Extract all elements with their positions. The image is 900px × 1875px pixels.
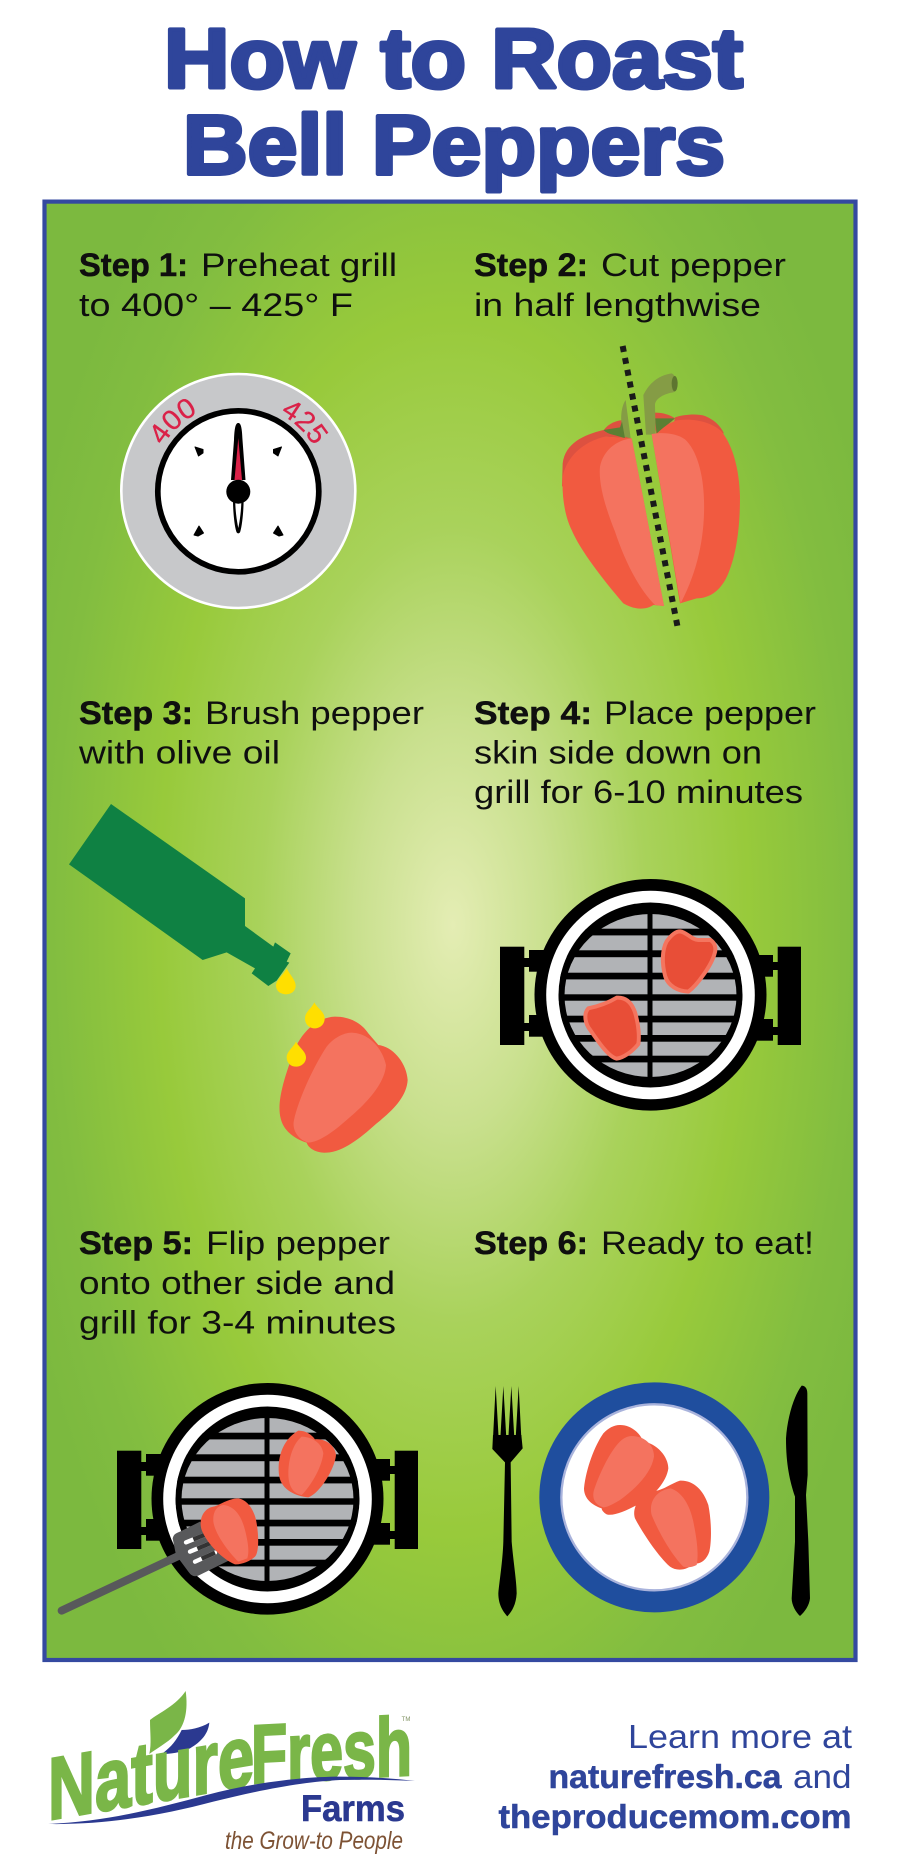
footer text: learn more: naturefresh.ca (548, 1758, 782, 1795)
step 4 text: Step 4: (474, 695, 592, 731)
step 6 text: Step 6: (474, 1225, 588, 1261)
title (164, 12, 743, 192)
step 3 text: Step 3: (79, 695, 193, 731)
step 4 text: skin side down on (474, 734, 762, 770)
icon: grill thermometer gauge: 425 (282, 402, 328, 443)
step 5 text: Step 5: (79, 1225, 193, 1261)
step 5 text (79, 1225, 396, 1340)
step 3 text: Brush pepper (205, 695, 424, 731)
step 6 text: Ready to eat! (601, 1225, 814, 1261)
icon: grill thermometer gauge (120, 372, 357, 610)
step 2 text: Cut pepper (601, 247, 786, 283)
icon: fork (492, 1386, 523, 1616)
logo: NatureFresh Farms: Fresh (251, 1700, 412, 1801)
icon: plate with roasted peppers (539, 1382, 769, 1612)
title: How to Roast (164, 12, 743, 106)
footer text: learn more: theproducemom.com (498, 1798, 852, 1835)
icon: olive oil bottle and first drop (69, 804, 296, 994)
footer text: learn more (498, 1718, 852, 1835)
step 1 text: Preheat grill (201, 247, 397, 283)
icon: knife (786, 1386, 810, 1616)
step 2 text: Step 2: (474, 247, 588, 283)
logo: NatureFresh Farms: Nature (48, 1705, 254, 1839)
step 5 text: Flip pepper (206, 1225, 390, 1261)
step 4 text: Place pepper (604, 695, 816, 731)
logo leaves (149, 1691, 209, 1754)
step 5 text: grill for 3-4 minutes (79, 1304, 396, 1340)
step 2 text (474, 247, 786, 323)
icon: grill with flipped peppers and fork (62, 1383, 418, 1615)
panel: steps background (44, 202, 856, 1660)
icon: grill thermometer gauge: 400 (152, 399, 195, 443)
step 3 text (78, 695, 424, 770)
step 1 text: to 400° – 425° F (79, 287, 353, 323)
step 2 text: in half lengthwise (474, 287, 761, 323)
step 3 text: with olive oil (78, 734, 280, 770)
logo: NatureFresh Farms: Farms (301, 1788, 405, 1829)
title: Bell Peppers (183, 98, 725, 192)
logo: NatureFresh Farms: TM (402, 1717, 410, 1723)
footer text: learn more: Learn more at (628, 1718, 852, 1755)
logo: NatureFresh Farms (48, 1691, 415, 1855)
icon: pepper being oiled (279, 1002, 408, 1153)
logo: NatureFresh Farms: the Grow-to People (225, 1827, 403, 1855)
step 1 text (79, 247, 397, 323)
icon: pepper cut in half (562, 346, 740, 627)
step 4 text (474, 695, 816, 810)
icon: grill with peppers skin side down (500, 879, 801, 1111)
step 1 text: Step 1: (79, 247, 188, 283)
step 5 text: onto other side and (79, 1265, 395, 1301)
step 4 text: grill for 6-10 minutes (474, 774, 803, 810)
footer text: learn more: and (793, 1758, 852, 1795)
step 6 text (474, 1225, 814, 1261)
